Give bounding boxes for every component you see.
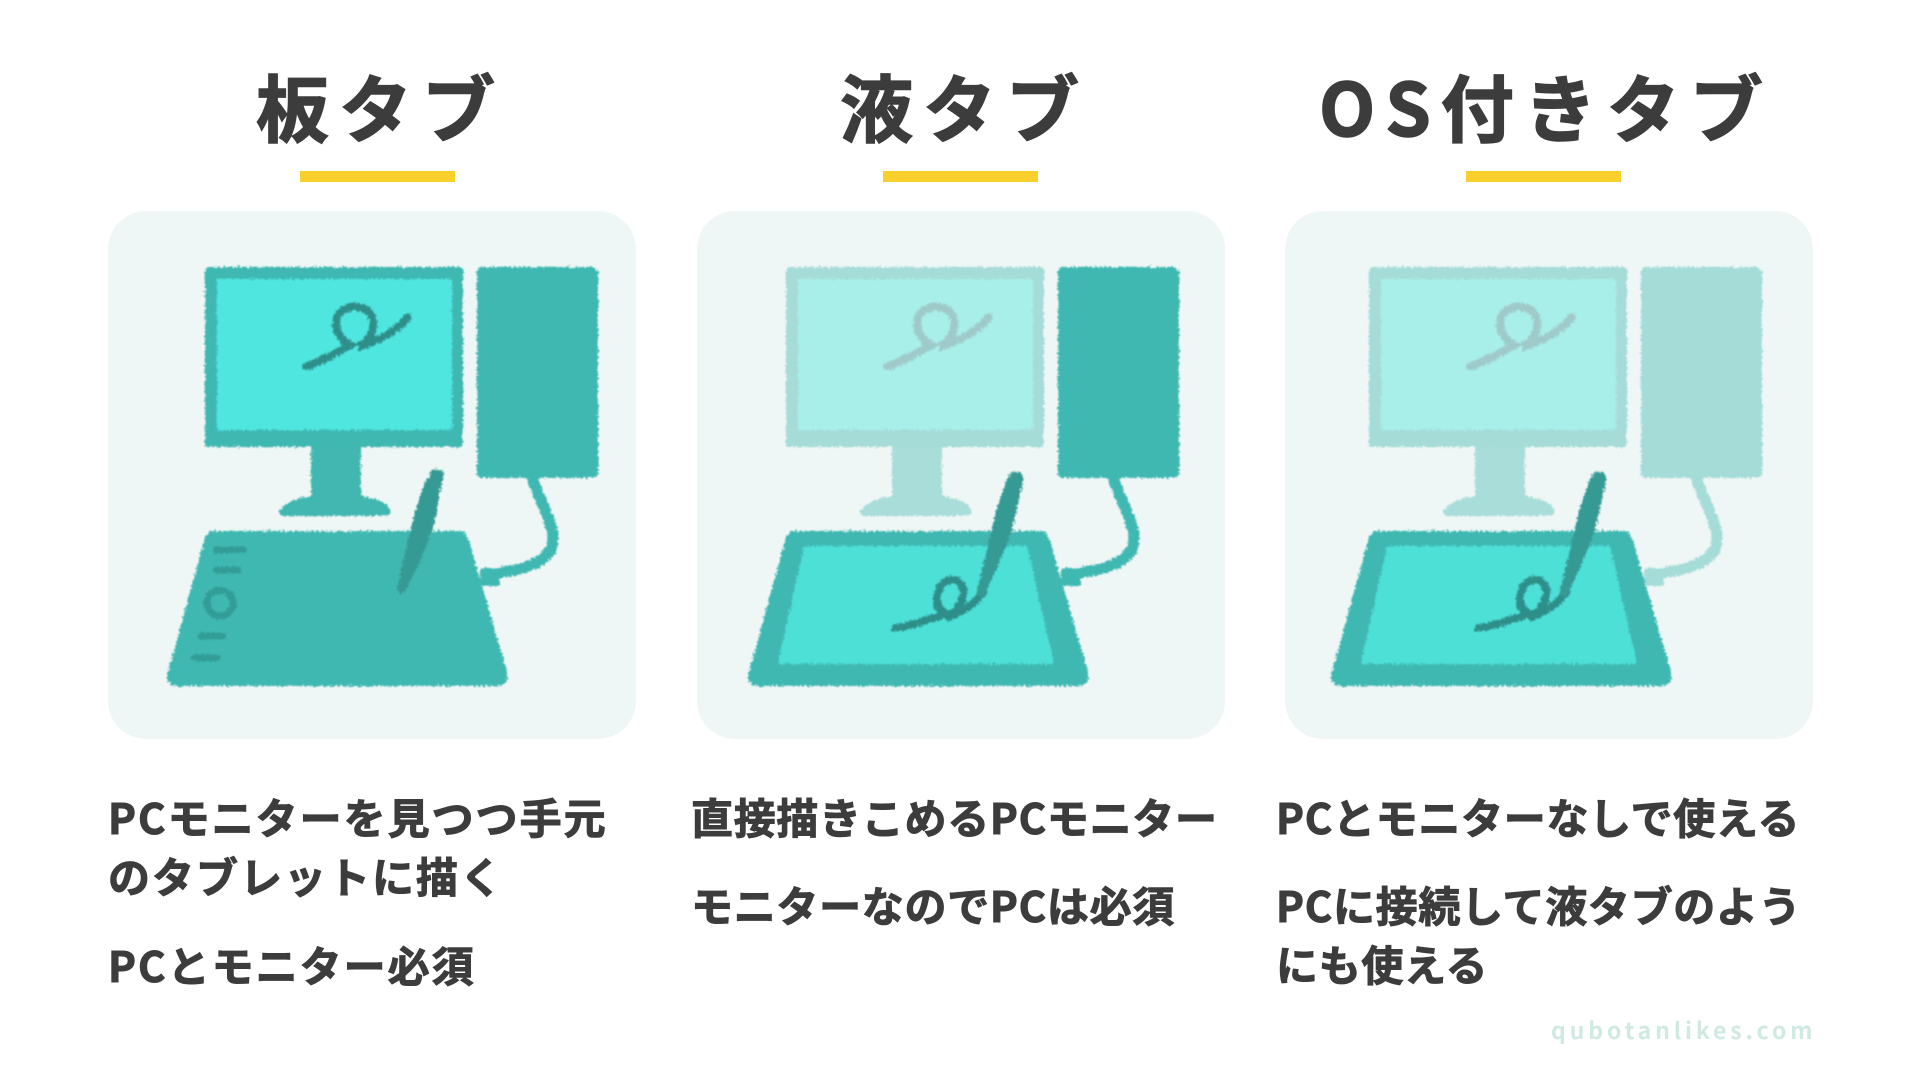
icon: display tablet <box>748 531 1089 686</box>
icon: computer tower <box>477 267 598 478</box>
icon: standalone tablet <box>1331 531 1672 686</box>
heading: OS付きタブ: OS付きタブ <box>1319 52 1773 158</box>
text: display tablet requirement: モニターなのでPCは必須 <box>691 874 1175 935</box>
illustration: display tablet setup <box>748 267 1179 686</box>
heading underline 1 <box>300 171 455 182</box>
heading: 液タブ: 液タブ <box>840 52 1089 158</box>
text: standalone tablet description: PCとモニターなしで使える <box>1276 786 1800 847</box>
text: pen tablet requirement: PCとモニター必須 <box>108 934 476 995</box>
icon: faded connector <box>1644 568 1664 586</box>
heading underline 3 <box>1466 171 1621 182</box>
icon: stylus and stroke <box>1478 471 1606 628</box>
illustration: pen tablet setup <box>167 267 598 686</box>
panel: standalone tablet background <box>1285 211 1813 739</box>
text: display tablet description: 直接描きこめるPCモニター <box>691 786 1218 847</box>
icon: connector <box>480 568 500 586</box>
text: standalone tablet usage: にも使える <box>1276 933 1488 994</box>
watermark: qubotanlikes.com <box>1551 1012 1816 1046</box>
text: pen tablet description <box>108 786 608 906</box>
icon: faded monitor <box>1369 267 1627 516</box>
text: standalone tablet usage <box>1276 874 1801 994</box>
icon: faded cable <box>1649 474 1717 575</box>
text: pen tablet description: のタブレットに描く <box>108 845 504 906</box>
icon: cable <box>1066 474 1134 575</box>
icon: monitor <box>205 267 463 516</box>
heading: 板タブ: 板タブ <box>256 52 505 158</box>
icon: cable <box>485 474 553 575</box>
panel: display tablet background <box>697 211 1225 739</box>
panel: pen tablet background <box>108 211 636 739</box>
icon: pen tablet <box>167 531 508 686</box>
icon: stylus and stroke <box>895 471 1023 628</box>
illustration: standalone tablet setup <box>1331 267 1762 686</box>
icon: faded computer tower <box>1641 267 1762 478</box>
icon: stylus <box>397 469 443 594</box>
icon: connector <box>1061 568 1081 586</box>
text: standalone tablet usage: PCに接続して液タブのよう <box>1276 874 1801 935</box>
text: pen tablet description: PCモニターを見つつ手元 <box>108 786 608 847</box>
icon: computer tower <box>1058 267 1179 478</box>
icon: faded monitor <box>786 267 1044 516</box>
heading underline 2 <box>883 171 1038 182</box>
